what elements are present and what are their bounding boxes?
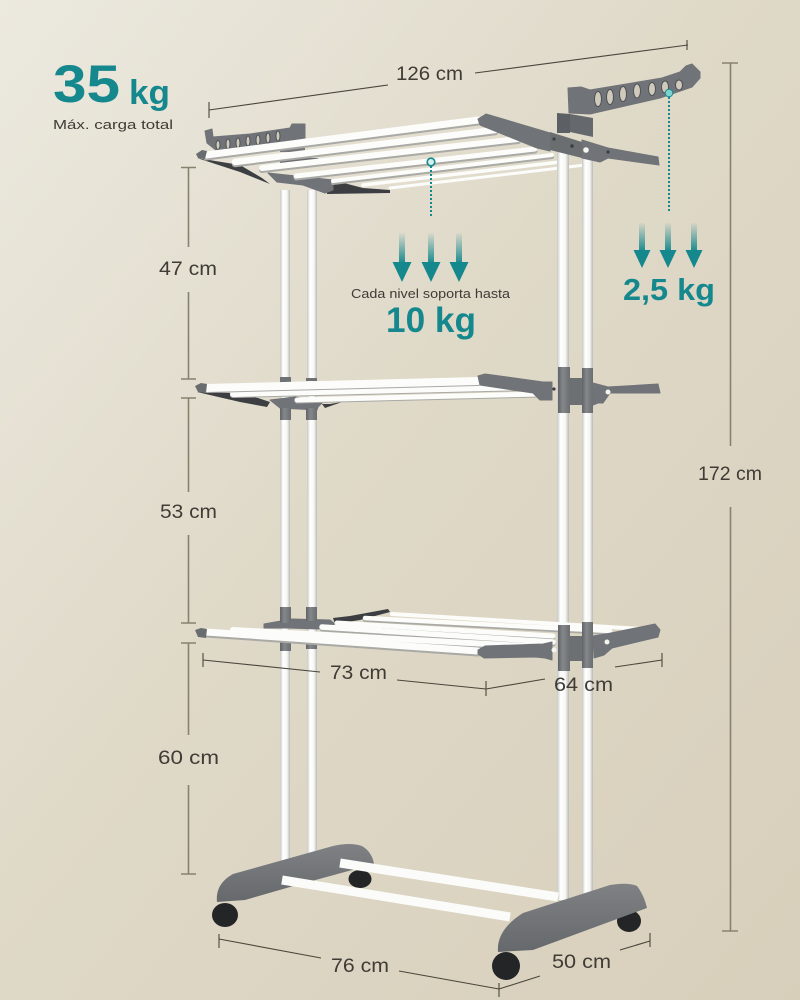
- left columns: [280, 377, 291, 383]
- dimension: 126 cm: [209, 40, 688, 118]
- marker on hanger: [665, 89, 673, 212]
- arrows: [392, 233, 468, 282]
- front wheels: [212, 903, 520, 980]
- callout: per-level load: [351, 158, 511, 340]
- marker on rail: [427, 158, 435, 216]
- left foot: [217, 844, 374, 902]
- stat: total load: 35: [53, 55, 120, 114]
- right arm: [478, 114, 550, 151]
- stat: total load: kg: [129, 74, 170, 112]
- dimension: 76 cm: 76 cm: [331, 956, 389, 977]
- dimension: 47 cm: [159, 168, 217, 379]
- dimension: 64 cm: 64 cm: [554, 675, 613, 696]
- arrows: [634, 223, 702, 268]
- callout: hanger load: [623, 89, 715, 307]
- dimension: 50 cm: 50 cm: [552, 952, 611, 973]
- bottom tier: [195, 607, 660, 671]
- dimension: 76 cm: [219, 934, 499, 997]
- arms and hub: [478, 642, 552, 660]
- dimension: 73 cm: [203, 653, 486, 696]
- dimension: 73 cm: 73 cm: [330, 663, 387, 684]
- poles over rear rails: [557, 150, 593, 185]
- dimension: 172 cm: [698, 63, 762, 931]
- base: [212, 844, 647, 980]
- rear wheels: [348, 870, 641, 932]
- callout: hanger load: 2,5 kg: [623, 272, 715, 307]
- dimension: 172 cm: 172 cm: [698, 464, 762, 485]
- stat: total load: Máx. carga total: [53, 117, 173, 132]
- rear poles: [280, 150, 593, 900]
- dimension: 60 cm: [158, 643, 219, 874]
- stat: total load: [53, 55, 173, 132]
- top tier: [196, 64, 700, 194]
- left hanger arm: [205, 124, 305, 151]
- callout: per-level load: Cada nivel soporta hasta: [351, 286, 511, 301]
- drying rack: [195, 64, 700, 980]
- callout: per-level load: 10 kg: [386, 301, 476, 340]
- right hanger arm: [568, 64, 700, 114]
- rails: [206, 120, 585, 188]
- dimension: 53 cm: 53 cm: [160, 502, 217, 523]
- dimension: 47 cm: 47 cm: [159, 259, 217, 280]
- rails: [206, 614, 642, 653]
- dimension: 50 cm: [499, 933, 650, 989]
- dimension: 53 cm: [160, 398, 217, 623]
- dimension: 126 cm: 126 cm: [396, 64, 463, 85]
- pivot: [550, 113, 610, 158]
- left arm underside: [197, 158, 270, 184]
- crossbars: [340, 863, 558, 897]
- rails: [206, 381, 540, 401]
- right foot: [498, 884, 647, 952]
- arms and hub: [478, 374, 552, 400]
- dimension: 64 cm: [486, 653, 662, 696]
- middle tier: [195, 367, 660, 420]
- dimension: 60 cm: 60 cm: [158, 748, 219, 769]
